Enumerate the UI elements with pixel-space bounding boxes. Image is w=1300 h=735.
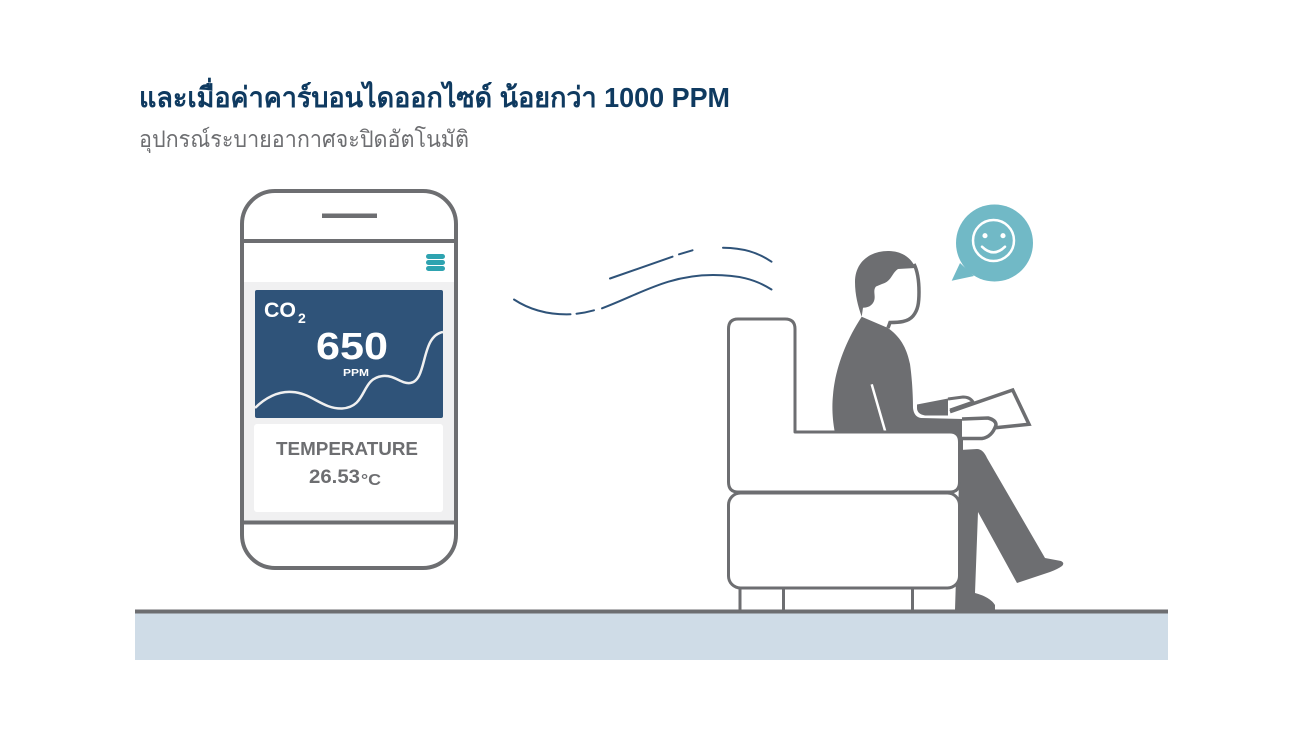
CO2 unit: PPM — [343, 368, 369, 379]
phone screen dividers — [243, 241, 455, 522]
title: และเมื่อค่าคาร์บอนไดออกไซด์ น้อยกว่า 1000 PPM — [139, 77, 730, 113]
person: arm highlight — [872, 384, 886, 433]
icon: menu — [426, 254, 445, 271]
phone speaker — [322, 214, 377, 218]
person — [832, 251, 1063, 610]
CO2 value: 650 — [316, 326, 388, 368]
air flow lines — [514, 248, 772, 314]
chair legs — [740, 588, 912, 610]
armchair — [728, 319, 960, 610]
person: torso — [832, 317, 963, 450]
icon: smiling speech bubble — [952, 204, 1033, 282]
phone body — [242, 191, 456, 568]
bubble — [952, 204, 1033, 282]
person: legs — [955, 449, 1063, 610]
person: upper hand — [917, 397, 973, 416]
temperature card — [254, 424, 443, 512]
person: lower hand — [962, 418, 996, 438]
temperature unit: °C — [361, 472, 381, 489]
smiley — [973, 220, 1014, 261]
CO2 card — [255, 290, 443, 418]
person: hair — [855, 251, 916, 317]
temperature label: TEMPERATURE — [276, 439, 418, 459]
chair seat — [728, 493, 960, 588]
floor — [135, 610, 1168, 660]
CO2 subscript: 2 — [298, 310, 306, 326]
screen background — [244, 282, 454, 521]
temperature value: 26.53 — [309, 467, 360, 488]
CO2 trend line — [255, 332, 443, 409]
chair back and arm — [728, 319, 960, 492]
person: face outline — [888, 264, 919, 328]
subtitle: อุปกรณ์ระบายอากาศจะปิดอัตโนมัติ — [139, 126, 469, 153]
phone — [242, 191, 456, 568]
CO2 label: CO — [264, 299, 296, 322]
book — [950, 390, 1029, 428]
